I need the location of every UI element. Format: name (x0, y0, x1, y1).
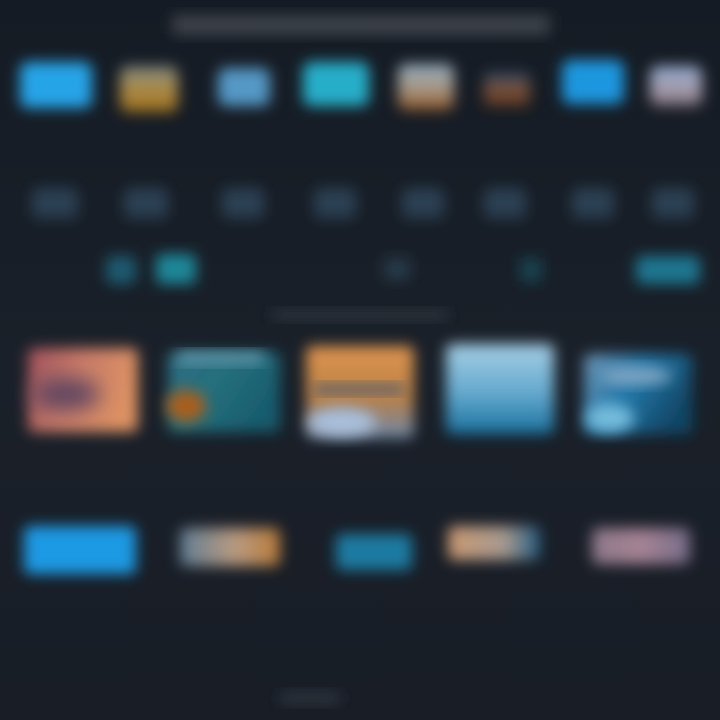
title bar (172, 15, 550, 35)
footer label (280, 692, 340, 704)
icon 3 (222, 188, 264, 218)
badge: dim teal (520, 258, 542, 282)
wide tile 5: mauve (592, 528, 690, 564)
badge: teal right (636, 256, 700, 284)
image 5: deep blue (584, 354, 692, 434)
wide tile 4: peach (448, 526, 540, 560)
tile 5: orange and sky (398, 64, 454, 110)
icon 6 (484, 188, 526, 218)
icon 8 (652, 188, 694, 218)
top row of image tiles (20, 60, 702, 112)
badge: dim centre (384, 258, 410, 280)
wide tile 3: dark cyan (336, 534, 412, 570)
image 2: teal landscape (166, 352, 280, 432)
image 4: light sky (446, 344, 554, 434)
tile 1: bright blue (20, 62, 92, 108)
image 1: sunset (28, 348, 138, 432)
tile 3: steel blue (218, 68, 270, 106)
tile 2: gold (120, 66, 178, 112)
tile 4: cyan (303, 62, 369, 106)
bottom row of wide images (24, 526, 690, 574)
wide tile 2: sky and orange (180, 528, 280, 566)
icon 1 (32, 188, 78, 218)
tile 8: lavender (650, 66, 702, 106)
icon 5 (402, 188, 444, 218)
badge: teal bright (156, 254, 196, 284)
section heading (272, 310, 448, 320)
image 3: orange and clouds (306, 346, 414, 438)
third row of badges (106, 254, 700, 284)
row of large images (28, 344, 692, 438)
tile 7: blue (562, 60, 624, 104)
icon 4 (314, 188, 356, 218)
tile 6: dark orange (484, 72, 530, 106)
icon 7 (572, 188, 614, 218)
badge: teal left (106, 256, 136, 284)
second row of dim icons (32, 188, 694, 218)
icon 2 (124, 188, 168, 218)
wide tile 1: bright blue (24, 526, 136, 574)
